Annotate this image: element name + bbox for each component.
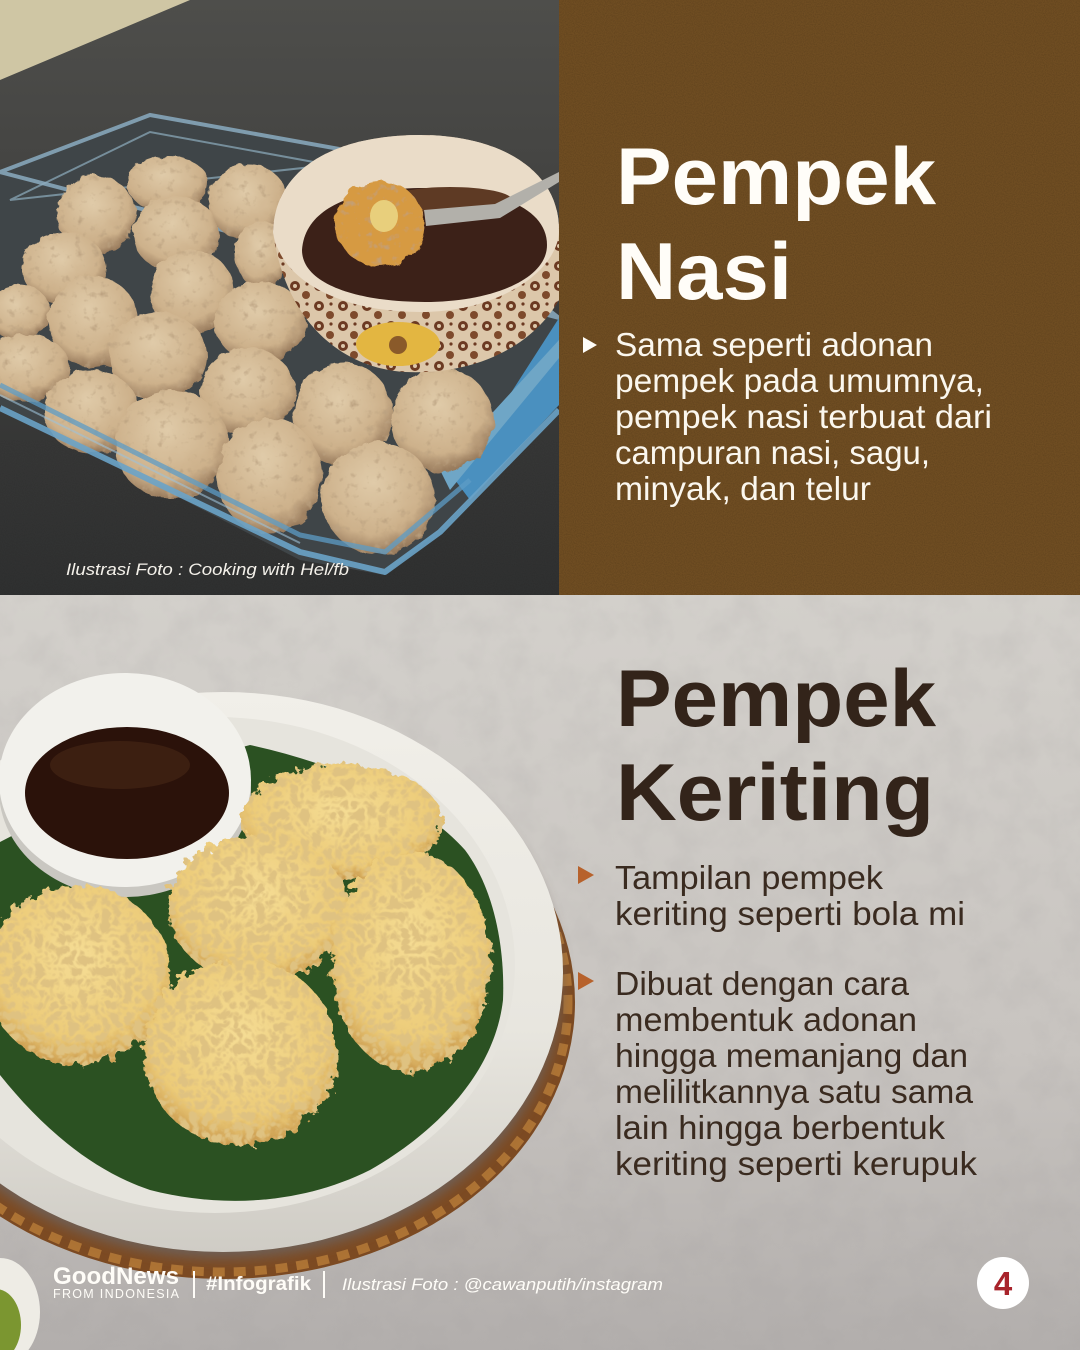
small side dish with sambal [0,1258,40,1350]
text block: pempek nasi description: pempek pada umumnya, [615,362,984,399]
panel: pempek nasi [559,0,1080,595]
photo caption: Ilustrasi Foto : Cooking with Hel/fb [66,560,349,579]
heading: pempek keriting [616,654,937,838]
text block: how it is made: melilitkannya satu sama [615,1073,974,1110]
food balls [0,156,493,554]
logo: GoodNews: GoodNews [53,1263,179,1290]
text block: how it is made: lain hingga berbentuk [615,1109,946,1146]
icon: bullet arrow [583,337,597,353]
page number badge: 4 [994,1265,1013,1302]
panel: pempek keriting background [0,595,1080,1350]
front rim of glass dish [0,385,559,572]
text block: pempek nasi description [615,326,992,507]
rattan placemat [0,725,575,1279]
photo: pempek nasi in glass dish [0,0,559,595]
fried curly pempek [0,764,491,1145]
text block: appearance: Tampilan pempek [615,859,884,896]
text block: appearance [615,859,965,932]
white plate [0,692,563,1252]
banana leaf [0,745,503,1201]
footer: logo and credits [53,1263,663,1301]
text block: how it is made: hingga memanjang dan [615,1037,968,1074]
hashtag: #Infografik [206,1274,311,1295]
text block: how it is made [615,965,978,1182]
page number badge [977,1257,1029,1309]
text block: pempek nasi description: campuran nasi, sagu, [615,434,930,471]
heading: pempek nasi: Nasi [616,227,792,317]
bowl of cuko sauce [273,135,559,372]
heading: pempek nasi [616,132,937,317]
heading: pempek keriting: Keriting [616,748,934,838]
logo: GoodNews: FROM INDONESIA [53,1287,180,1301]
text block: how it is made: keriting seperti kerupuk [615,1145,978,1182]
heading: pempek nasi: Pempek [616,132,937,222]
photo credit: Ilustrasi Foto : @cawanputih/instagram [342,1275,663,1294]
photo: pempek keriting on plate [0,673,575,1350]
text block: how it is made: Dibuat dengan cara [615,965,910,1002]
text block: pempek nasi description: Sama seperti adonan [615,326,933,363]
text block: pempek nasi description: pempek nasi terbuat dari [615,398,992,435]
text block: pempek nasi description: minyak, dan telur [615,470,871,507]
icon: bullet arrow one [578,866,594,884]
pempek on fork [336,172,559,267]
icon: bullet arrow two [578,972,594,990]
glass dish [0,115,559,575]
dipping bowl [0,673,251,897]
heading: pempek keriting: Pempek [616,654,937,744]
text block: appearance: keriting seperti bola mi [615,895,965,932]
text block: how it is made: membentuk adonan [615,1001,917,1038]
